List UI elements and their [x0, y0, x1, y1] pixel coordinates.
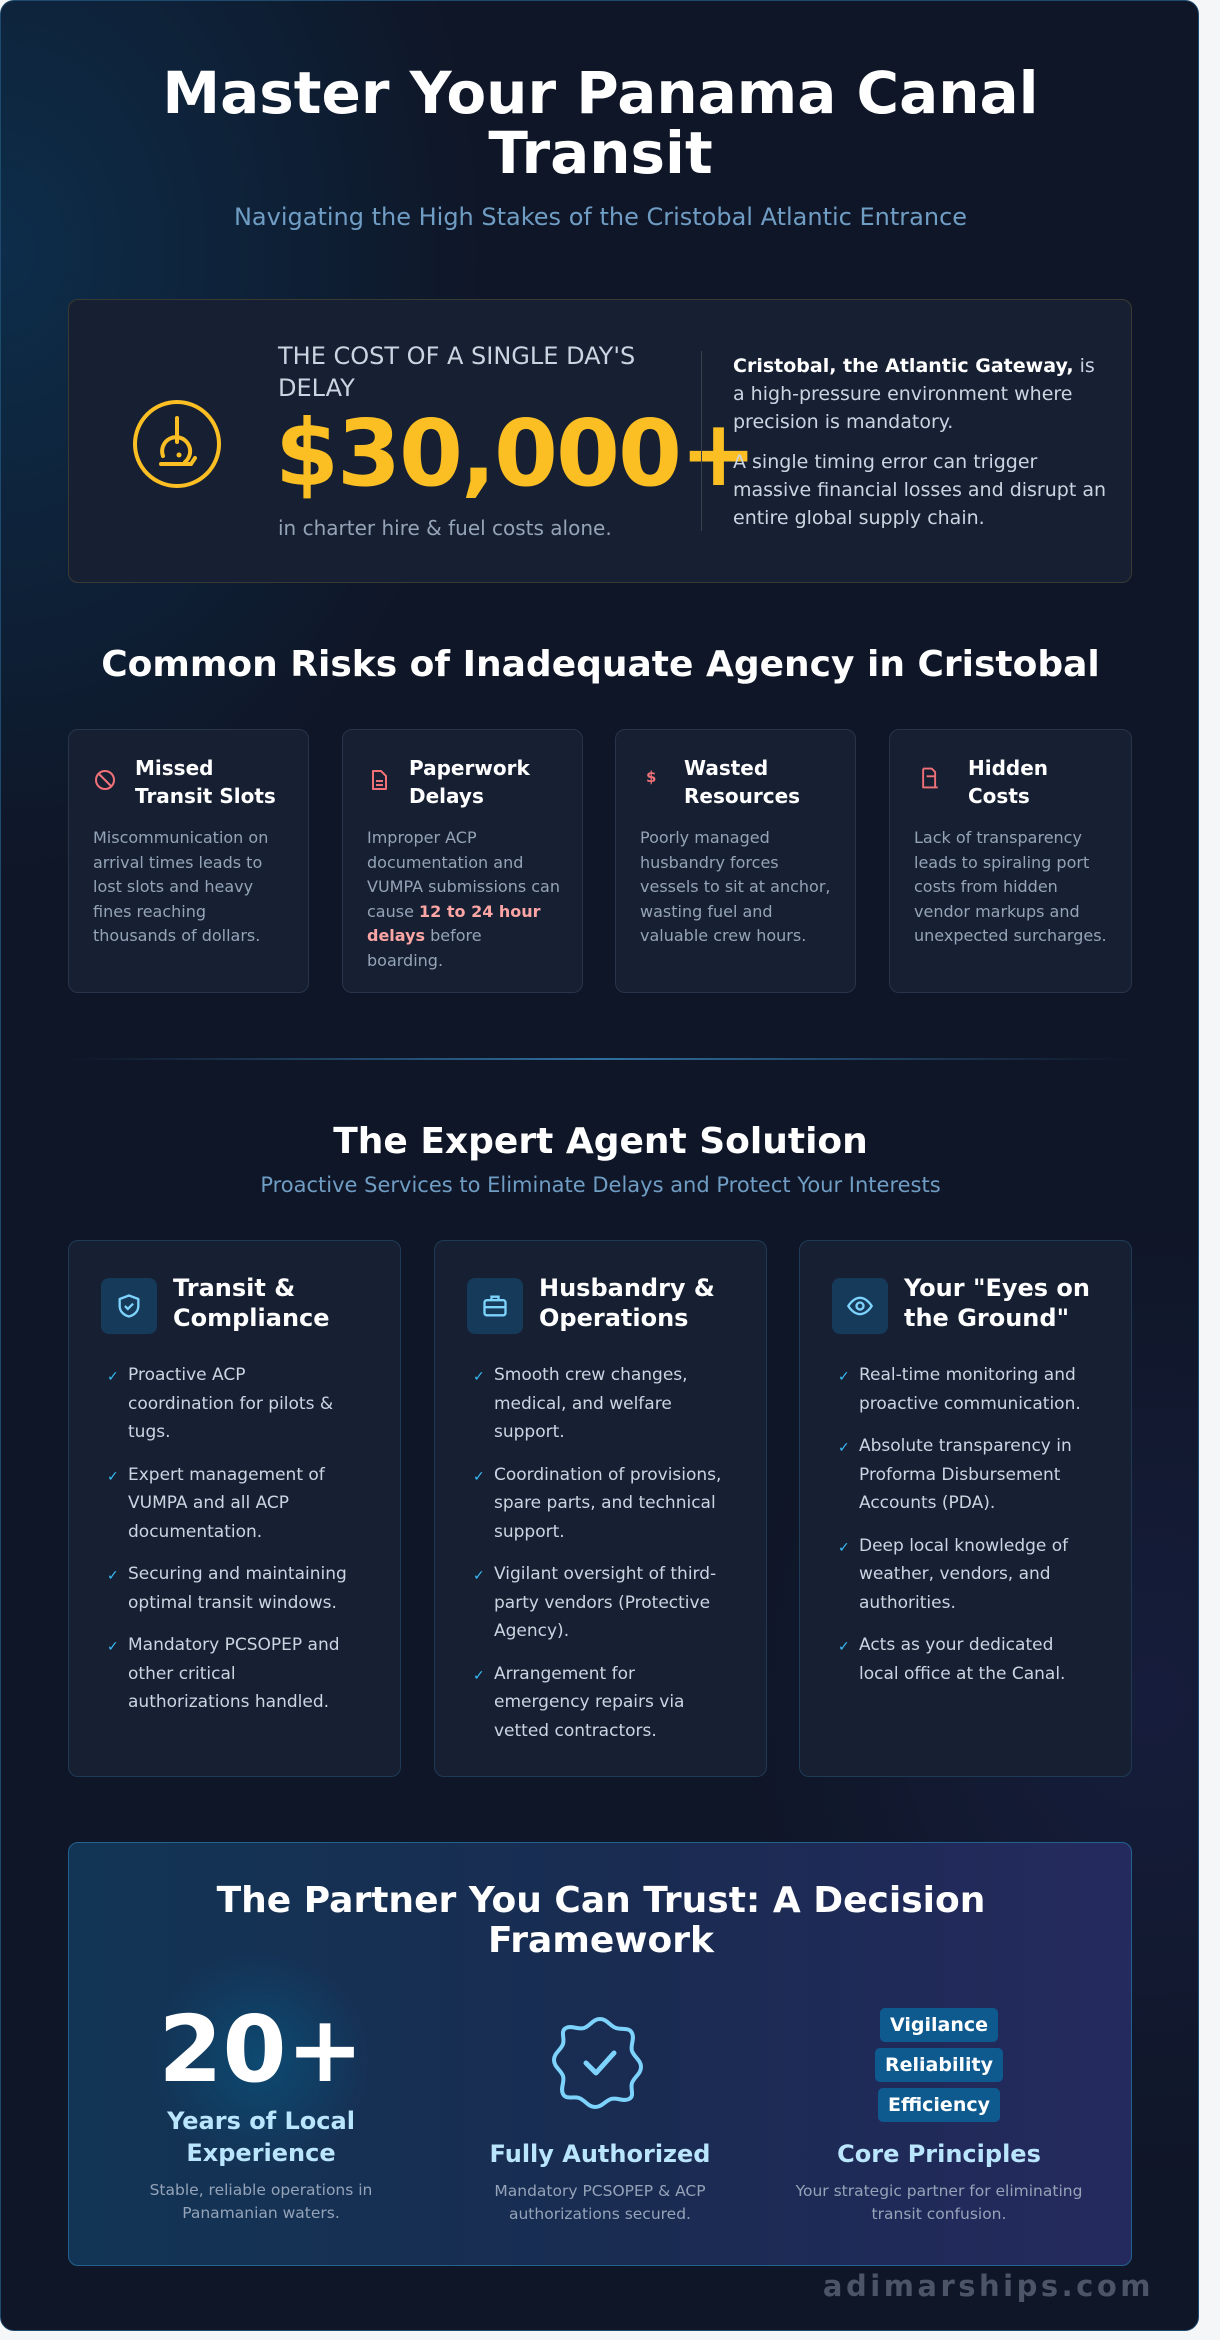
- stat: fully authorized: authorizations secured.: [509, 2205, 691, 2223]
- panel: paperwork delays: Paperwork: [409, 756, 530, 780]
- panel: transit & compliance: other critical: [128, 1664, 236, 1684]
- panel: hidden costs: Lack of transparency leads to spiraling port costs from hidden vendor markups and unexpected surcharges.: [914, 828, 1107, 945]
- panel: husbandry & operations: support.: [494, 1522, 565, 1542]
- panel: transit & compliance: optimal transit windows.: [128, 1592, 337, 1612]
- panel: eyes on the ground: Your "Eyes on: [904, 1274, 1090, 1302]
- panel: eyes on the ground: Real-time monitoring and: [859, 1365, 1076, 1385]
- panel: eyes on the ground: weather, vendors, and: [859, 1564, 1051, 1584]
- panel: husbandry & operations: vetted contractors.: [494, 1720, 657, 1740]
- right text: precision is mandatory.: [733, 411, 953, 433]
- panel: transit & compliance: VUMPA and all ACP: [128, 1493, 289, 1513]
- right text: entire global supply chain.: [733, 507, 985, 529]
- panel: transit & compliance: Expert management of: [128, 1464, 325, 1484]
- panel: missed transit slots: [68, 729, 309, 993]
- stat: 20+ years: Years of Local: [167, 2107, 355, 2135]
- stat: 20+ years: 20+: [158, 1996, 364, 2103]
- panel: decision framework: [68, 1842, 1132, 2266]
- watermark: adimarships.com: [823, 2269, 1154, 2303]
- panel: husbandry & operations: party vendors (Protective: [494, 1592, 710, 1612]
- panel: husbandry & operations: Agency).: [494, 1621, 569, 1641]
- panel: husbandry & operations: Husbandry &: [539, 1274, 715, 1302]
- panel: hidden costs: Hidden: [968, 756, 1048, 780]
- divider in cost card: [701, 351, 702, 531]
- panel: wasted resources: Poorly managed husbandry forces vessels to sit at anchor, wasting fuel and valuable crew hours.: [640, 828, 830, 945]
- right text: A single timing error can trigger: [733, 451, 1037, 473]
- right text: Cristobal, the Atlantic Gateway, is: [733, 355, 1095, 377]
- icon: document: [372, 770, 387, 790]
- panel: missed transit slots: Missed: [135, 756, 213, 780]
- panel: eyes on the ground: the Ground": [904, 1304, 1069, 1332]
- stat: core principles: Your strategic partner for eliminating: [796, 2182, 1082, 2200]
- stat: 20+ years: Panamanian waters.: [182, 2204, 340, 2222]
- icon: badge check: [552, 2017, 643, 2109]
- heading: Framework: [488, 1920, 714, 1961]
- panel: transit & compliance: documentation.: [128, 1522, 262, 1542]
- panel: missed transit slots: Transit Slots: [135, 784, 276, 808]
- panel: husbandry & operations: medical, and welfare: [494, 1394, 672, 1414]
- stat: core principles: Reliability: [885, 2054, 993, 2076]
- stat: core principles: transit confusion.: [872, 2205, 1006, 2223]
- panel: husbandry & operations: support.: [494, 1422, 565, 1442]
- panel: transit & compliance: authorizations handled.: [128, 1692, 329, 1712]
- panel: paperwork delays: [342, 729, 583, 993]
- panel: paperwork delays: Delays: [409, 784, 484, 808]
- panel: husbandry & operations: Operations: [539, 1304, 688, 1332]
- stat: core principles: Core Principles: [837, 2140, 1041, 2168]
- stat: 20+ years: Stable, reliable operations in: [150, 2181, 372, 2199]
- big number: $30,000+: [275, 400, 755, 507]
- panel: transit & compliance: Transit &: [173, 1274, 295, 1302]
- panel: husbandry & operations: Arrangement for: [494, 1664, 635, 1684]
- panel: hidden costs: [889, 729, 1132, 993]
- panel: transit & compliance: tugs.: [128, 1422, 170, 1442]
- panel: transit & compliance: Securing and maintaining: [128, 1564, 347, 1584]
- subtitle: Navigating the High Stakes of the Cristobal Atlantic Entrance: [234, 203, 967, 231]
- panel: transit & compliance: coordination for pilots &: [128, 1394, 333, 1414]
- panel: husbandry & operations: Vigilant oversight of third-: [494, 1564, 716, 1584]
- stat: fully authorized: Mandatory PCSOPEP & ACP: [494, 2182, 706, 2200]
- panel: eyes on the ground: local office at the Canal.: [859, 1664, 1065, 1684]
- right text: a high-pressure environment where: [733, 383, 1072, 405]
- panel: missed transit slots: Miscommunication on arrival times leads to lost slots and heavy fines reaching thousands of dollars.: [93, 828, 268, 945]
- stat: core principles: Vigilance: [890, 2014, 988, 2036]
- icon: receipt: [922, 768, 938, 788]
- panel: husbandry & operations: spare parts, and technical: [494, 1493, 716, 1513]
- caption: in charter hire & fuel costs alone.: [278, 516, 612, 540]
- title: [162, 59, 1039, 187]
- panel: transit & compliance: Mandatory PCSOPEP and: [128, 1635, 340, 1655]
- heading: The Partner You Can Trust: A Decision: [217, 1880, 985, 1921]
- icon: briefcase: [467, 1278, 523, 1334]
- stat: 20+ years: Experience: [186, 2139, 336, 2167]
- title: Master Your Panama Canal: [162, 59, 1039, 127]
- panel: wasted resources: [615, 729, 856, 993]
- stat: core principles: Efficiency: [888, 2094, 990, 2116]
- panel: husbandry & operations: Coordination of provisions,: [494, 1464, 721, 1484]
- icon: dollar: $: [646, 768, 656, 786]
- panel: transit & compliance: Proactive ACP: [128, 1365, 246, 1385]
- panel: transit & compliance: [68, 1240, 401, 1777]
- panel: eyes on the ground: Acts as your dedicated: [859, 1635, 1053, 1655]
- heading: expert agent solution: The Expert Agent Solution: [333, 1121, 868, 1162]
- label: cost of single day: THE COST OF A SINGLE DAY'S DELAY: [278, 342, 635, 402]
- panel: wasted resources: Resources: [684, 784, 800, 808]
- panel: eyes on the ground: authorities.: [859, 1592, 956, 1612]
- panel: hidden costs: Costs: [968, 784, 1030, 808]
- right text: [733, 355, 1106, 529]
- right text: massive financial losses and disrupt an: [733, 479, 1106, 501]
- panel: eyes on the ground: [799, 1240, 1132, 1777]
- stat: core principles: [796, 2008, 1082, 2223]
- icon: shield: [101, 1278, 157, 1334]
- stat: fully authorized: [490, 2017, 710, 2223]
- icon: ban: [95, 770, 115, 790]
- panel: eyes on the ground: proactive communication.: [859, 1394, 1081, 1414]
- panel: paperwork delays: boarding.: [367, 950, 443, 970]
- panel: eyes on the ground: Deep local knowledge of: [859, 1536, 1068, 1556]
- panel: eyes on the ground: Absolute transparency in: [859, 1436, 1072, 1456]
- panel: cost of delay: [68, 299, 1132, 583]
- panel: husbandry & operations: Smooth crew changes,: [494, 1365, 688, 1385]
- panel: wasted resources: Wasted: [684, 756, 768, 780]
- panel: eyes on the ground: Accounts (PDA).: [859, 1493, 995, 1513]
- panel: paperwork delays: Improper ACP documentation and VUMPA submissions can cause 12 to 24 hour delays before: [367, 828, 560, 945]
- panel: transit & compliance: Compliance: [173, 1304, 330, 1332]
- icon: eye: [832, 1278, 888, 1334]
- stat: fully authorized: Fully Authorized: [490, 2140, 710, 2168]
- heading: common risks: Common Risks of Inadequate Agency in Cristobal: [101, 644, 1100, 685]
- title: Transit: [488, 119, 713, 187]
- subheading: Proactive Services to Eliminate Delays and Protect Your Interests: [260, 1173, 941, 1197]
- heading: [216, 1880, 985, 1961]
- panel: husbandry & operations: [434, 1240, 767, 1777]
- panel: eyes on the ground: Proforma Disbursement: [859, 1464, 1060, 1484]
- stat: 20+ years: [150, 1996, 372, 2222]
- panel: husbandry & operations: emergency repairs via: [494, 1692, 684, 1712]
- icon: clock/anchor circle: [133, 400, 221, 488]
